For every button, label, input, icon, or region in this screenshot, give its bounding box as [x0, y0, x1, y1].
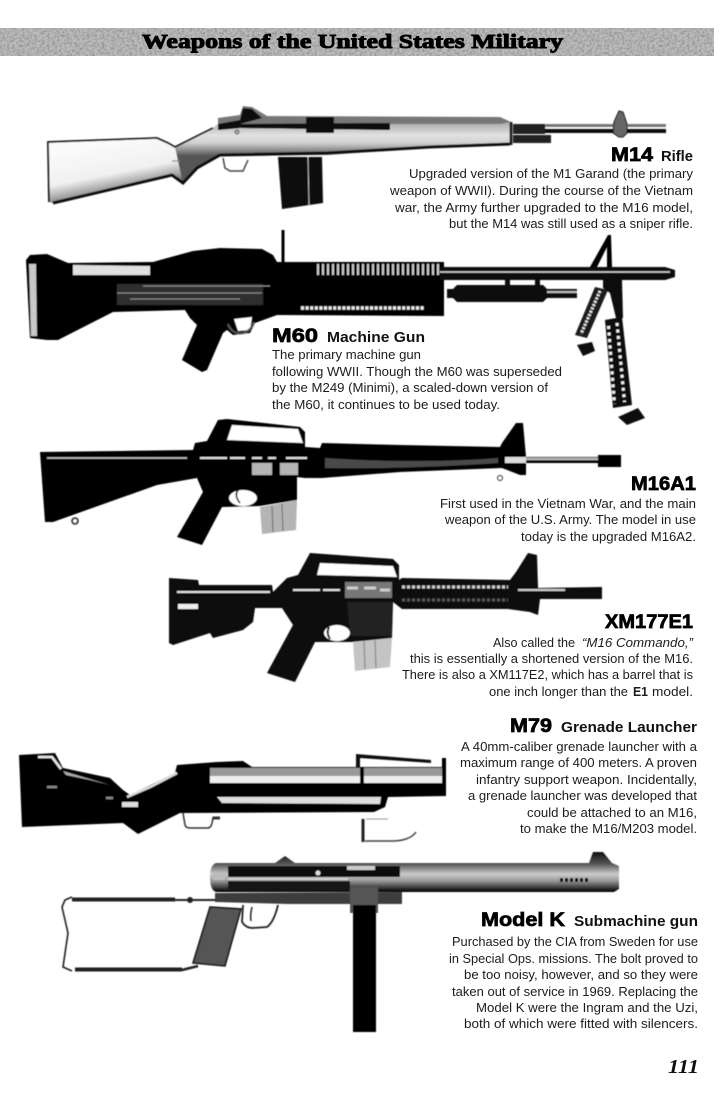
text: M79 Grenade Launcher: maximum range of 400 meters. A proven: [460, 755, 697, 770]
text: M60 Machine Gun: Machine Gun: [327, 330, 425, 346]
text: M14 Rifle: weapon of WWII). During the course of the Vietnam: [389, 183, 693, 198]
text: M16A1: [440, 474, 696, 544]
text: M79 Grenade Launcher: [460, 716, 698, 836]
title banner: [0, 28, 714, 56]
text: Model K Submachine gun: Model K were the Ingram and the Uzi,: [476, 1000, 698, 1015]
text: Model K Submachine gun: Purchased by the CIA from Sweden for use: [452, 934, 698, 949]
text: M60 Machine Gun: following WWII. Though the M60 was superseded: [272, 364, 562, 379]
text: XM177E1: XM177E1: [605, 612, 693, 633]
barrel: [440, 267, 675, 280]
text: Model K Submachine gun: in Special Ops. missions. The bolt proved to: [449, 951, 698, 966]
bipod legs: [603, 280, 623, 318]
text: M14 Rifle: but the M14 was still used as a sniper rifle.: [449, 216, 693, 231]
text: XM177E1: this is essentially a shortened version of the M16.: [410, 651, 693, 666]
text: M60 Machine Gun: the M60, it continues to be used today.: [272, 397, 500, 412]
text: M16A1: weapon of the U.S. Army. The model in use: [444, 512, 696, 527]
icon: grenade round: [363, 819, 416, 842]
text: M16A1: First used in the Vietnam War, and the main: [440, 496, 696, 511]
text: M79 Grenade Launcher: to make the M16/M203 model.: [520, 821, 697, 836]
text: XM177E1: one inch longer than the: [489, 684, 628, 699]
text: XM177E1: E1: [633, 684, 648, 699]
page number: 111: [668, 1056, 699, 1078]
text: Model K Submachine gun: Submachine gun: [574, 914, 698, 930]
handguard ribs: [318, 264, 438, 275]
text: M16A1: today is the upgraded M16A2.: [521, 529, 696, 544]
text: Model K Submachine gun: Model K: [481, 910, 565, 931]
text: XM177E1: Also called the: [493, 635, 575, 650]
icon: M16A1 rifle: [40, 419, 621, 545]
text: M79 Grenade Launcher: M79: [510, 716, 552, 737]
text: Model K Submachine gun: taken out of service in 1969. Replacing the: [452, 984, 698, 999]
text: M60 Machine Gun: M60: [272, 326, 318, 347]
title banner: Weapons of the United States Military: [142, 31, 563, 53]
text: M14 Rifle: M14: [611, 145, 653, 166]
text: XM177E1: [402, 612, 694, 699]
text: XM177E1: model.: [652, 684, 693, 699]
text: M16A1: M16A1: [631, 474, 696, 495]
text: M79 Grenade Launcher: could be attached to an M16,: [527, 805, 697, 820]
text: XM177E1: There is also a XM117E2, which has a barrel that is: [402, 667, 693, 682]
text: M79 Grenade Launcher: Grenade Launcher: [561, 720, 697, 736]
text: Model K Submachine gun: [449, 910, 698, 1031]
gas tube: [447, 285, 577, 302]
text: M79 Grenade Launcher: A 40mm-caliber grenade launcher with a: [461, 739, 698, 754]
text: M14 Rifle: [389, 145, 694, 231]
text: M79 Grenade Launcher: infantry support weapon. Incidentally,: [476, 772, 697, 787]
text: XM177E1: “M16 Commando,”: [582, 635, 694, 650]
text: Model K Submachine gun: both of which were fitted with silencers.: [464, 1016, 698, 1031]
text: Model K Submachine gun: be too noisy, however, and so they were: [464, 967, 698, 982]
text: M14 Rifle: Rifle: [661, 149, 693, 165]
text: M60 Machine Gun: by the M249 (Minimi), a scaled-down version of: [272, 380, 548, 395]
text: M60 Machine Gun: [272, 326, 562, 412]
icon: M60 machine gun: [26, 230, 675, 425]
icon: M14 rifle: [48, 106, 666, 209]
icon: Model K submachine gun: [62, 852, 619, 1032]
text: M79 Grenade Launcher: a grenade launcher was developed that: [468, 788, 697, 803]
text: M14 Rifle: Upgraded version of the M1 Garand (the primary: [409, 166, 694, 181]
icon: XM177E1 carbine: [169, 553, 602, 682]
front sight: [590, 235, 612, 267]
text: M14 Rifle: war, the Army further upgraded to the M16 model,: [394, 200, 693, 215]
text: M60 Machine Gun: The primary machine gun: [272, 347, 421, 362]
icon: M79 grenade launcher: [19, 753, 446, 834]
